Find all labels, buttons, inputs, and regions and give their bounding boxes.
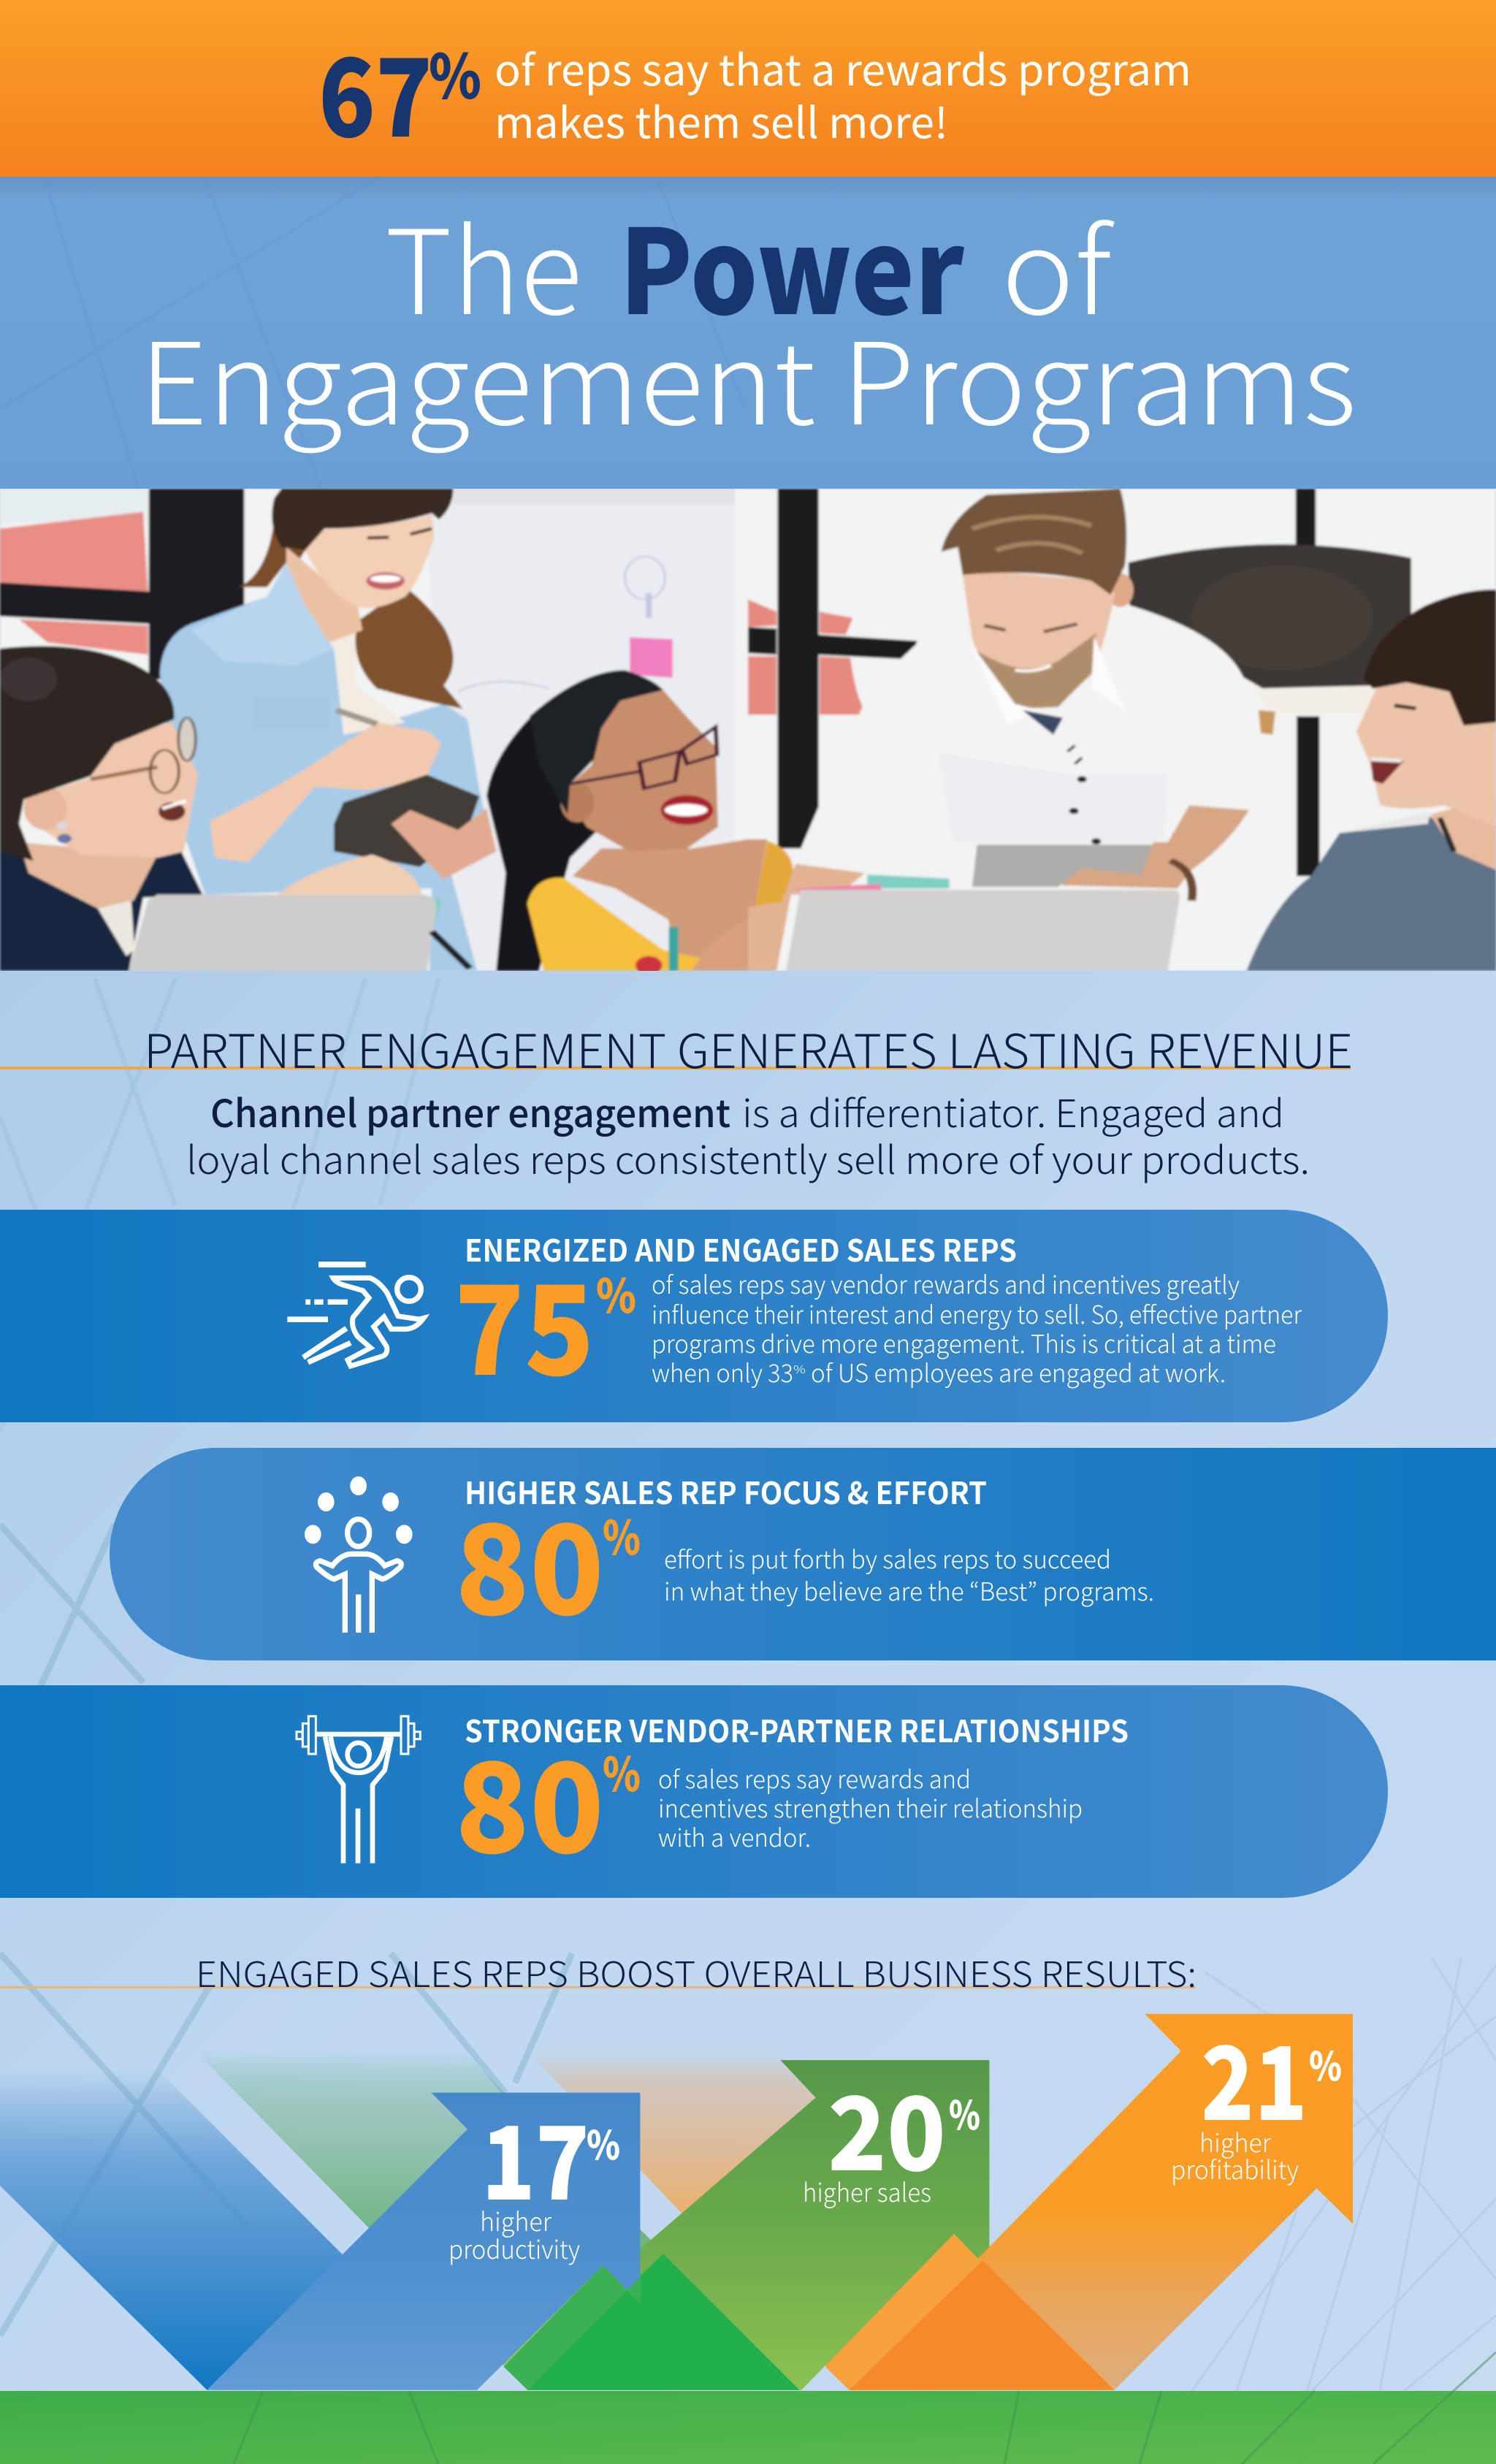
panel: energized and engaged sales reps xyxy=(0,1210,1388,1422)
title: Power xyxy=(619,179,965,348)
text: description: with a vendor. xyxy=(658,1818,811,1854)
text: description: of sales reps say vendor rewards and incentives greatly xyxy=(652,1265,1240,1301)
heading: ENERGIZED AND ENGAGED SALES REPS xyxy=(465,1227,1017,1271)
stat: 80 percent: % xyxy=(603,1501,641,1568)
text: rewards program statement: makes them sell more! xyxy=(495,89,948,150)
stat: 21 percent higher profitability xyxy=(1171,2003,1342,2187)
text: description: when only 33 xyxy=(652,1354,793,1389)
text: description xyxy=(658,1760,1083,1854)
stat: 20 percent higher sales: % xyxy=(949,2083,980,2141)
heading: partner engagement: PARTNER ENGAGEMENT GENERATES LASTING REVENUE xyxy=(144,1015,1353,1082)
stat: 20 percent higher sales: 20 xyxy=(828,2053,946,2200)
text: description: influence their interest and energy to sell. So, effective partner xyxy=(652,1295,1302,1331)
photo: team of colleagues laughing around laptops xyxy=(0,489,1496,974)
panel: higher sales rep focus and effort xyxy=(110,1448,1496,1660)
stat: 17 percent higher productivity: 17 xyxy=(481,2083,589,2230)
heading: HIGHER SALES REP FOCUS & EFFORT xyxy=(465,1469,987,1514)
stat: 75 percent: 75 xyxy=(454,1231,595,1411)
panel: orange stat banner xyxy=(0,0,1496,177)
icon: running person xyxy=(287,1262,424,1366)
panel: page background xyxy=(0,971,1496,2464)
stat: 17 percent higher productivity: % xyxy=(587,2113,620,2171)
stat: 21 percent higher profitability: profitability xyxy=(1171,2150,1299,2187)
person: woman with glasses at left xyxy=(0,646,203,971)
title xyxy=(140,179,1356,457)
text: description: incentives strengthen their relationship xyxy=(658,1789,1083,1825)
stat: 17 percent higher productivity: higher xyxy=(480,2202,552,2239)
panel: stronger vendor-partner relationships xyxy=(0,1685,1388,1898)
chart: rising arrows xyxy=(0,2003,1353,2390)
text block: intro xyxy=(186,1083,1310,1185)
text: rewards program statement: of reps say that a rewards program xyxy=(495,37,1191,98)
text block: intro: is a differentiator. Engaged and xyxy=(742,1083,1284,1138)
text: description: of sales reps say rewards and xyxy=(658,1760,971,1796)
title: The xyxy=(385,179,582,348)
text: description xyxy=(652,1265,1302,1389)
stat: 75 percent: % xyxy=(596,1259,636,1327)
text: description: % xyxy=(793,1362,806,1377)
stat: 80 percent: % xyxy=(603,1738,641,1805)
stat: 17 percent higher productivity xyxy=(449,2083,620,2267)
title: of xyxy=(1001,179,1115,348)
stat: 21 percent higher profitability: 21 xyxy=(1201,2003,1308,2150)
stat: 21 percent higher profitability: % xyxy=(1309,2034,1342,2092)
stat: 67 percent: 67 xyxy=(318,11,432,168)
text: description: of US employees are engaged at work. xyxy=(811,1354,1226,1389)
person: standing woman in denim xyxy=(160,489,496,971)
laptop: left xyxy=(129,895,470,971)
stat: 20 percent higher sales xyxy=(803,2053,980,2210)
footer band xyxy=(0,2352,1496,2464)
stat: 21 percent higher profitability: higher xyxy=(1199,2123,1271,2160)
text block: intro: Channel partner engagement xyxy=(210,1083,730,1138)
text: rewards program statement xyxy=(495,37,1191,150)
icon: person lifting barbell xyxy=(297,1716,420,1864)
stat: 80 percent: 80 xyxy=(455,1471,604,1650)
person: young man at right xyxy=(1246,590,1496,971)
panel: title band xyxy=(0,177,1496,489)
icon: person juggling xyxy=(305,1476,413,1633)
heading: STRONGER VENDOR-PARTNER RELATIONSHIPS xyxy=(465,1707,1129,1752)
person: woman in yellow dress with glasses xyxy=(486,670,748,974)
text: description: programs drive more engagement. This is critical at a time xyxy=(652,1324,1276,1360)
stat: 17 percent higher productivity: productivity xyxy=(449,2230,580,2267)
person: man in white shirt xyxy=(748,489,1266,971)
title: Engagement Programs xyxy=(140,293,1356,457)
text: description: effort is put forth by sales reps to succeed xyxy=(664,1540,1111,1576)
laptop: right xyxy=(786,874,1180,971)
heading: business results: ENGAGED SALES REPS BOOST OVERALL BUSINESS RESULTS: xyxy=(196,1946,1197,1997)
stat: 80 percent: 80 xyxy=(455,1709,604,1888)
text: description xyxy=(664,1540,1154,1608)
text: description: in what they believe are the “Best” programs. xyxy=(664,1572,1154,1608)
stat: 67 percent: % xyxy=(429,28,481,117)
text block: intro: loyal channel sales reps consistently sell more of your products. xyxy=(186,1130,1310,1185)
stat: 20 percent higher sales: higher sales xyxy=(803,2173,931,2210)
